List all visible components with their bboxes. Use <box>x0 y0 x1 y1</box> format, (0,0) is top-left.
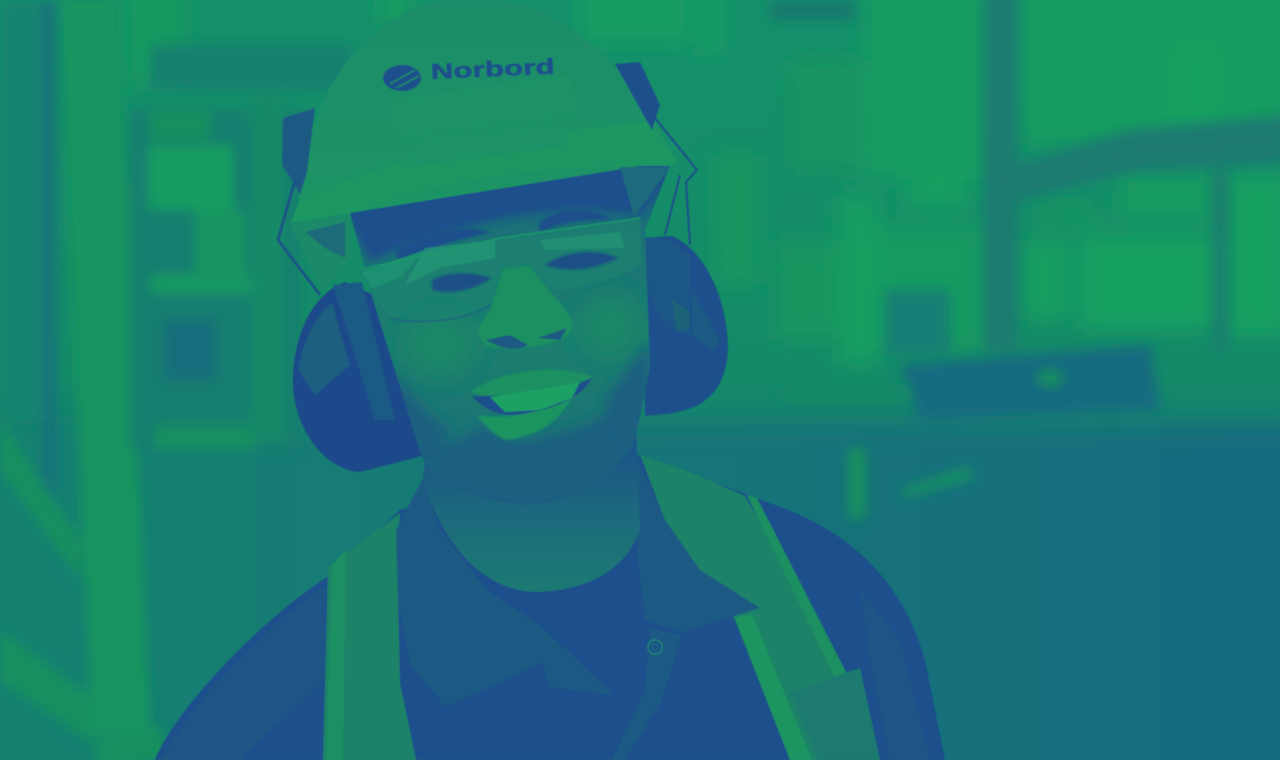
torso: dark jacket <box>155 455 945 760</box>
label stickers <box>388 74 576 138</box>
right side: bright panels <box>125 0 1280 365</box>
placket and button <box>612 628 682 760</box>
hi-vis vest, right strap <box>640 455 880 760</box>
ear defender: left <box>293 282 422 472</box>
neck <box>423 430 640 592</box>
eyebrows <box>540 210 612 232</box>
brim flap, left <box>290 213 352 292</box>
shirt collar, right <box>636 455 760 632</box>
ear defender: right <box>642 236 728 416</box>
Norbord logo <box>383 65 421 91</box>
structural beams, dark <box>770 0 1280 420</box>
worker <box>155 0 945 760</box>
helmet <box>290 0 677 292</box>
beard shadow <box>421 412 633 500</box>
cheek lights <box>416 322 464 372</box>
helmet clips and straps <box>278 62 697 295</box>
ground reflections <box>780 369 1064 518</box>
shirt collar, left <box>396 478 614 707</box>
ground plane <box>0 425 1280 760</box>
left side: pillars and scaffolding <box>0 0 350 760</box>
dome <box>298 0 677 213</box>
head and face <box>340 160 680 507</box>
brim flap, right <box>620 167 670 217</box>
mouth and smile <box>470 369 593 440</box>
hi-vis vest, left strap <box>323 513 416 760</box>
Norbord wordmark: Norbord <box>430 55 555 84</box>
glasses <box>358 218 642 322</box>
brim <box>290 122 677 223</box>
forehead shadow <box>350 170 666 263</box>
nose <box>479 266 573 349</box>
